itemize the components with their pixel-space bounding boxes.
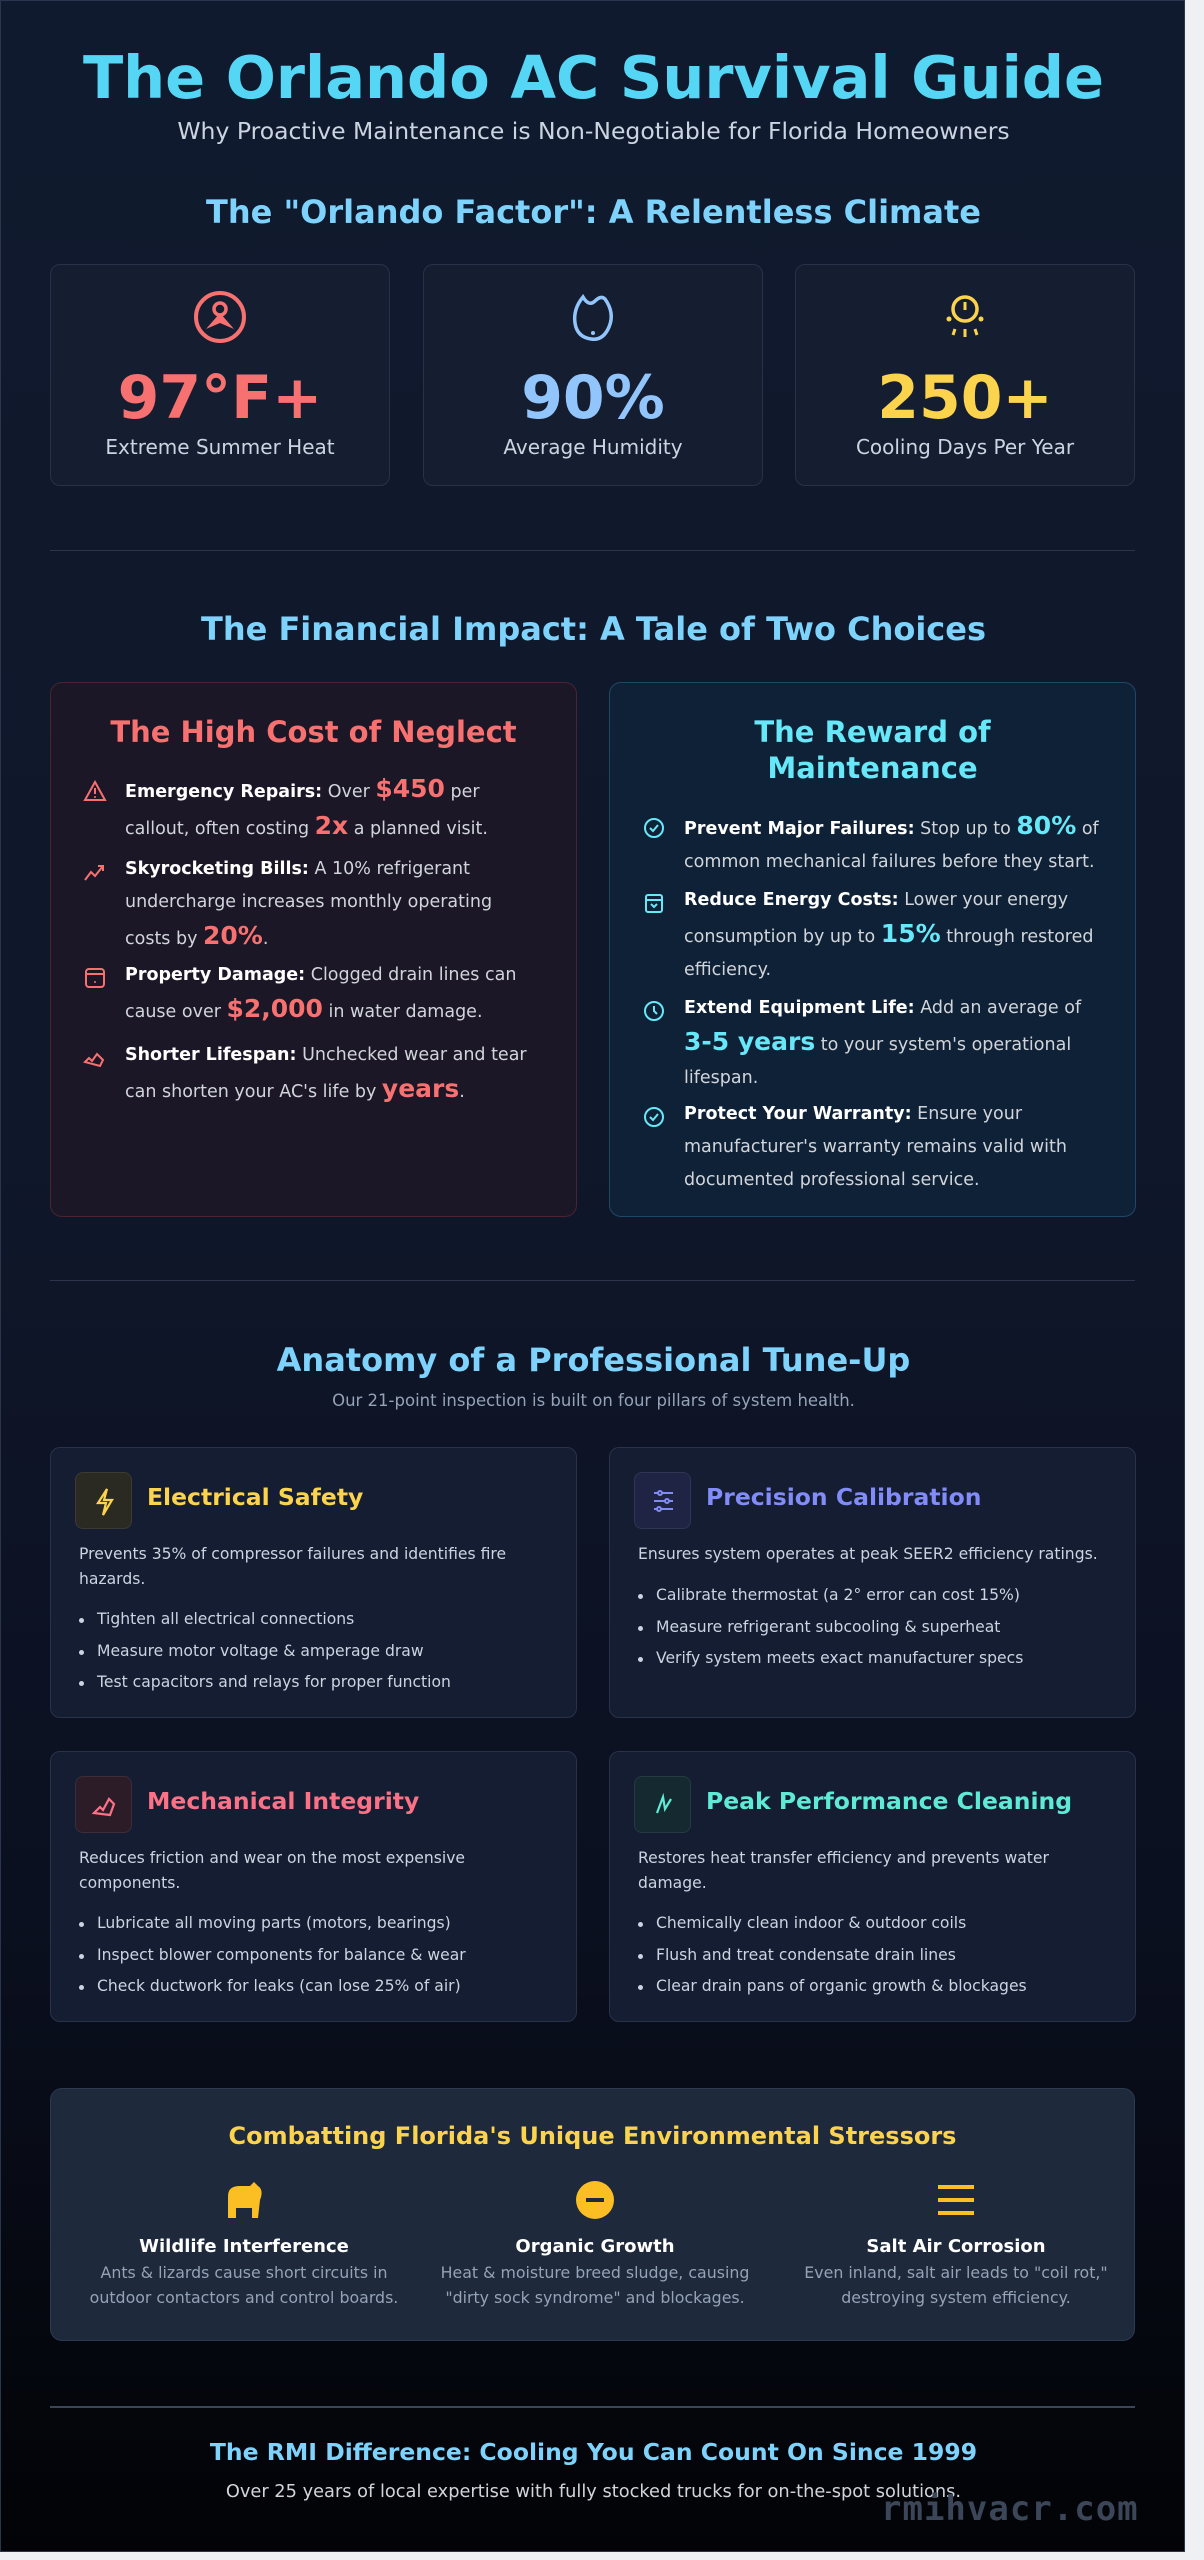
stressor: wildlife: Ants & lizards cause short circuits in outdoor contactors and control boards. bbox=[90, 2263, 398, 2307]
card: precision calibration: Precision Calibration bbox=[706, 1483, 981, 1511]
item: prevent failures: Prevent Major Failures: Stop up to 80% of common mechanical failures before they start. bbox=[684, 811, 1099, 872]
panel: environmental stressors bbox=[50, 2088, 1135, 2341]
card: peak performance cleaning: Restores heat transfer efficiency and prevents water damage. bbox=[638, 1849, 1049, 1892]
card: peak performance cleaning: Chemically clean indoor & outdoor coils bbox=[656, 1914, 966, 1932]
card: electrical safety: Prevents 35% of compressor failures and identifies fire hazards. bbox=[79, 1545, 506, 1588]
stat card: cooling days bbox=[795, 264, 1135, 486]
item: property damage: Property Damage: Clogged drain lines can cause over $2,000 in water damage. bbox=[125, 965, 516, 1023]
stressor: wildlife bbox=[90, 2182, 398, 2307]
subtitle: Why Proactive Maintenance is Non-Negotiable for Florida Homeowners bbox=[177, 117, 1010, 145]
card: precision calibration bbox=[609, 1447, 1136, 1718]
card: precision calibration: Verify system meets exact manufacturer specs bbox=[656, 1649, 1023, 1667]
item: shorter lifespan: Shorter Lifespan: Unchecked wear and tear can shorten your AC's life by years. bbox=[125, 1045, 527, 1103]
heading: financial impact: The Financial Impact: A Tale of Two Choices bbox=[201, 610, 986, 648]
heading: anatomy: Anatomy of a Professional Tune-Up bbox=[277, 1341, 910, 1379]
heading: orlando factor: The "Orlando Factor": A Relentless Climate bbox=[206, 193, 981, 231]
title: The Orlando AC Survival Guide bbox=[83, 43, 1104, 112]
card: mechanical integrity: Check ductwork for leaks (can lose 25% of air) bbox=[97, 1977, 461, 1995]
card: mechanical integrity bbox=[50, 1751, 577, 2022]
panel: maintenance bbox=[609, 682, 1136, 1217]
item: extend life: Extend Equipment Life: Add an average of 3-5 years to your system's operational lifespan. bbox=[684, 998, 1081, 1088]
stressor: salt air: Salt Air Corrosion bbox=[866, 2236, 1046, 2257]
stat card: humidity bbox=[423, 264, 763, 486]
footer heading: The RMI Difference: Cooling You Can Count On Since 1999 bbox=[210, 2438, 977, 2466]
icon: wrench bbox=[75, 1776, 132, 1833]
icon: sun bbox=[946, 295, 984, 337]
card: mechanical integrity: Reduces friction and wear on the most expensive components. bbox=[79, 1849, 465, 1892]
icon: drop bbox=[572, 294, 613, 341]
card: electrical safety: Tighten all electrical connections bbox=[97, 1610, 354, 1628]
stat card: heat: 97°F+ bbox=[118, 363, 322, 433]
stressor: organic growth: Heat & moisture breed sludge, causing "dirty sock syndrome" and blockages. bbox=[441, 2263, 749, 2307]
card: precision calibration: Calibrate thermostat (a 2° error can cost 15%) bbox=[656, 1586, 1020, 1604]
stressors title: Combatting Florida's Unique Environmental Stressors bbox=[229, 2122, 956, 2150]
item: emergency repairs: Emergency Repairs: Over $450 per callout, often costing 2x a planned visit. bbox=[125, 774, 488, 840]
card: precision calibration: Measure refrigerant subcooling & superheat bbox=[656, 1618, 1000, 1636]
card: electrical safety: Electrical Safety bbox=[147, 1483, 363, 1511]
card: mechanical integrity: Inspect blower components for balance & wear bbox=[97, 1946, 466, 1964]
card: mechanical integrity: Lubricate all moving parts (motors, bearings) bbox=[97, 1914, 451, 1932]
icon: sliders bbox=[634, 1472, 691, 1529]
card: electrical safety bbox=[50, 1447, 577, 1718]
stat card: heat bbox=[50, 264, 390, 486]
subheading: Our 21-point inspection is built on four pillars of system health. bbox=[332, 1391, 855, 1410]
stressor: organic growth: Organic Growth bbox=[515, 2236, 675, 2257]
stat card: cooling days: 250+ bbox=[877, 363, 1053, 433]
item: reduce energy: Reduce Energy Costs: Lower your energy consumption by up to 15% through restored efficiency. bbox=[684, 890, 1093, 980]
card: peak performance cleaning: Flush and treat condensate drain lines bbox=[656, 1946, 956, 1964]
neglect title: The High Cost of Neglect bbox=[110, 715, 517, 749]
stat card: humidity: Average Humidity bbox=[503, 435, 683, 459]
item: warranty: Protect Your Warranty: Ensure your manufacturer's warranty remains valid with documented professional service. bbox=[684, 1104, 1067, 1190]
card: electrical safety: Measure motor voltage & amperage draw bbox=[97, 1642, 424, 1660]
stat card: cooling days: Cooling Days Per Year bbox=[856, 435, 1074, 459]
card: mechanical integrity: Mechanical Integrity bbox=[147, 1787, 419, 1815]
stressor: salt air bbox=[804, 2185, 1108, 2307]
maintenance title bbox=[754, 715, 991, 785]
card: precision calibration: Ensures system operates at peak SEER2 efficiency ratings. bbox=[638, 1545, 1098, 1563]
maintenance title: The Reward of bbox=[754, 715, 991, 749]
icon: heat bbox=[194, 291, 246, 343]
card: peak performance cleaning: Clear drain pans of organic growth & blockages bbox=[656, 1977, 1027, 1995]
stat card: heat: Extreme Summer Heat bbox=[105, 435, 335, 459]
card: electrical safety: Test capacitors and relays for proper function bbox=[97, 1673, 451, 1691]
icon: zap bbox=[634, 1776, 691, 1833]
stat card: humidity: 90% bbox=[521, 363, 665, 433]
icon: bolt bbox=[75, 1472, 132, 1529]
panel: neglect bbox=[50, 682, 577, 1217]
footer text: Over 25 years of local expertise with fully stocked trucks for on-the-spot solutions. bbox=[226, 2481, 961, 2502]
stressor: salt air: Even inland, salt air leads to "coil rot," destroying system efficiency. bbox=[804, 2263, 1108, 2307]
item: skyrocketing bills: Skyrocketing Bills: A 10% refrigerant undercharge increases monthly operating costs by 20%. bbox=[125, 859, 492, 950]
stressor: wildlife: Wildlife Interference bbox=[139, 2236, 349, 2257]
watermark: rmihvacr.com bbox=[881, 2489, 1139, 2529]
card: peak performance cleaning bbox=[609, 1751, 1136, 2022]
stressor: organic growth bbox=[441, 2181, 749, 2307]
card: peak performance cleaning: Peak Performance Cleaning bbox=[706, 1787, 1072, 1815]
maintenance title: Maintenance bbox=[767, 751, 978, 785]
